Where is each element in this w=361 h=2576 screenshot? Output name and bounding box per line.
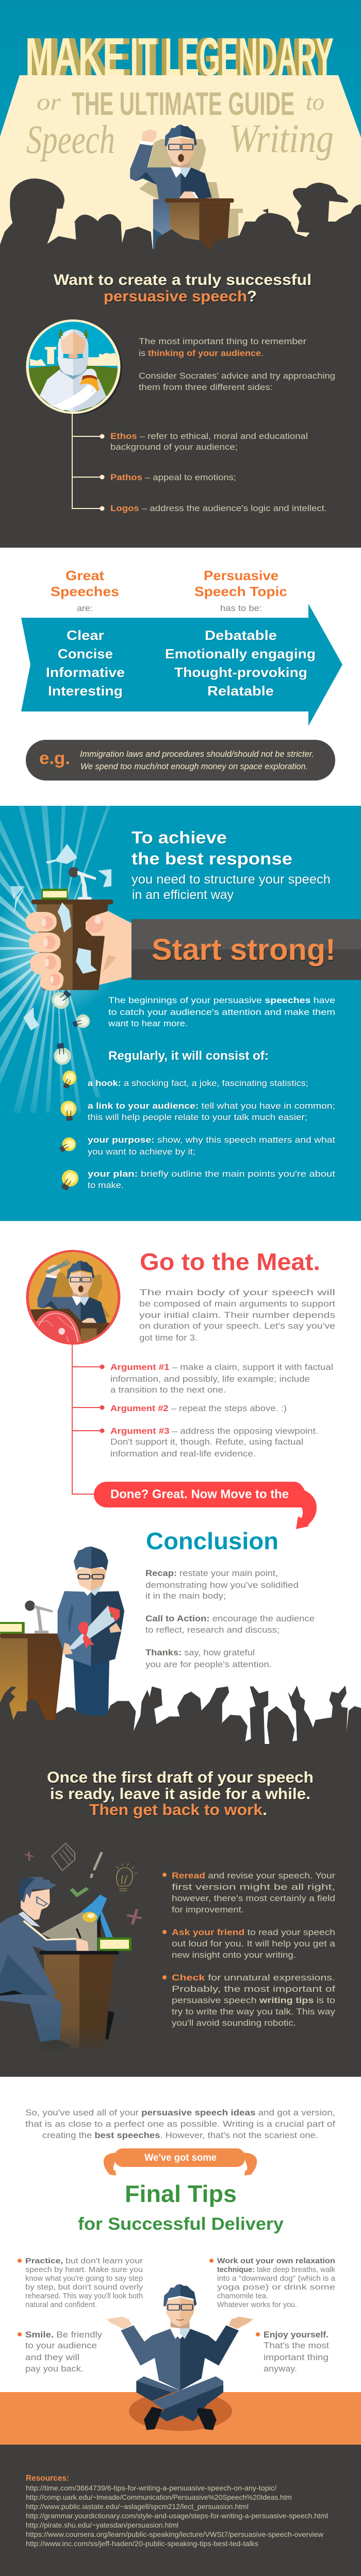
qualities lists: Informative [46,665,125,680]
qualities lists: Debatable [205,628,277,643]
list with bulb icons: to make. [88,1180,124,1190]
qualities lists: Relatable [207,683,274,699]
tips list: out loud for you. It will help you get a [172,1939,336,1948]
flying papers and microphone [10,844,111,1030]
recap text: it in the main body; [145,1591,226,1601]
ethos pathos logos list: Ethos – refer to ethical, moral and educational [110,431,308,441]
example pill: Immigration laws and procedures should/should not be stricter. [80,749,314,759]
subtitle: to [306,89,324,115]
qualities lists: Clear [67,628,104,643]
resources heading: Resources: [26,2474,69,2483]
heading: for Successful Delivery [78,2214,284,2234]
connector tree [72,414,104,510]
intro text: got time for 3. [139,1333,198,1343]
column headings: Great [65,568,104,583]
list with bulb icons: your purpose: show, why this speech matters and what [88,1135,335,1145]
tips list: Probably, the most important of [172,1984,335,1994]
body text: to catch your audience's attention and make them [108,1007,335,1017]
intro text: The main body of your speech will [139,1287,335,1297]
panel: go to the meat [25,1248,335,1529]
recap text: you are for people's attention. [145,1659,272,1669]
arguments list: Argument #2 – repeat the steps above. :) [110,1403,287,1413]
heading: Go to the Meat. [140,1248,320,1275]
tip: relaxation: yoga pose) or drink some [217,2283,335,2292]
tips list: for improvement. [172,1905,244,1914]
tip: practice [18,2257,143,2309]
list with bulb icons: this will help people relate to your talk much easier; [88,1112,307,1122]
heading: Conclusion [146,1528,278,1554]
start strong band: Start strong! [152,933,336,967]
arguments list: Don't support it, though. Refute, using factual [110,1437,303,1447]
tips list: Ask your friend to read your speech [172,1927,335,1937]
column headings: Speeches [51,584,119,599]
qualities lists: Thought-provoking [174,665,307,680]
heading: Once the first draft of your speech [47,1768,314,1786]
column subheadings [77,603,262,613]
arguments list [110,1362,333,1459]
tip: enjoy: anyway. [264,2364,297,2374]
heading: Final Tips [125,2180,237,2207]
illustration: speaker with bouquet [0,1547,124,1722]
tips list: try to write the way you talk. This way [172,2007,336,2016]
teal arrow banner [21,604,342,726]
ethos pathos logos list: Pathos – appeal to emotions; [110,472,236,482]
intro text: your initial claim. Their number depends [139,1310,335,1320]
tips list: Reread and revise your speech. Your [172,1871,335,1880]
heading [47,1768,314,1819]
tips list: you'll avoid sounding robotic. [172,2018,296,2028]
illustration: meditating speaker [106,2284,253,2431]
recap text: demonstrating how you've solidified [145,1580,299,1590]
recap text: Recap: restate your main point, [145,1568,278,1578]
resource links: http://grammar.yourdictionary.com/style-and-usage/steps-for-writing-a-persuasive-speech.html [26,2512,328,2520]
resource links: http://pirate.shu.edu/~yatesdan/persuasion.html [26,2521,178,2529]
tip: smile: pay you back. [25,2364,84,2374]
subtitle: Writing [229,116,334,161]
tip: practice: know what you're going to say step [25,2274,143,2283]
panel: dark socrates section [0,251,361,548]
dark background [0,2445,361,2576]
tip: relaxation: Work out your own relaxation [217,2257,335,2265]
heading: Then get back to work . [89,1801,267,1819]
audience silhouettes [0,178,361,252]
list with bulb icons: a link to your audience: tell what you have in common; [88,1101,335,1111]
resource links: http://www.public.iastate.edu/~aslagell/spcm212/lect_persuasion.html [26,2502,249,2511]
subtitle [26,86,334,162]
body text [108,995,335,1028]
intro text [139,336,335,392]
list with bulb icons: you want to achieve by it; [88,1147,195,1157]
icon: socrates portrait [23,319,124,415]
arguments list: Argument #1 – make a claim, support it with factual [110,1362,333,1372]
tips list: new insight onto your writing. [172,1950,296,1960]
banner: we've got some [104,2148,257,2176]
resource links [26,2484,328,2548]
panel: dark revision section [0,1686,361,2077]
ethos pathos logos list: Logos – address the audience's logic and intellect. [110,503,327,513]
spotlight beam [0,75,361,258]
ethos pathos logos list [110,431,327,513]
light rays [0,806,110,1113]
intro text: is thinking of your audience . [139,348,264,358]
panel: conclusion [0,1528,315,1722]
panel: great speeches comparison [21,568,342,781]
tip: smile: and they will [25,2352,79,2362]
tip: practice: rehearsed. This way you'll look both [25,2292,143,2300]
recap text: Call to Action: encourage the audience [145,1614,315,1623]
audience crowd silhouette [0,1686,361,1757]
start strong band [132,919,361,980]
tip: practice: Practice, but don't learn your [25,2257,143,2265]
connector tree [72,1345,104,1494]
intro text: creating the best speeches . However, that's not the scariest one. [42,2130,318,2140]
tip: enjoy [256,2330,329,2374]
body text: want to hear more. [108,1019,188,1028]
resource links: http://time.com/3664739/6-tips-for-writing-a-persuasive-speech-on-any-topic/ [26,2484,276,2492]
heading: is ready, leave it aside for a while. [50,1785,310,1803]
icon: speaker with fork and meat [25,1250,120,1348]
example pill: e.g. [39,749,70,768]
column headings: Speech Topic [194,584,287,599]
tip: smile [18,2330,103,2374]
tip: enjoy: important thing [264,2352,329,2362]
sub heading: Regularly, it will consist of: [108,1049,269,1063]
panel: resources [0,2445,361,2576]
arguments list: information and real-life evidence. [110,1449,256,1459]
banner: we've got some: We've got some [144,2153,217,2163]
subtitle: Speech [26,117,115,162]
arguments list: Argument #3 – address the opposing viewpoint. [110,1426,318,1436]
recap text [145,1568,315,1669]
intro text [25,2108,335,2140]
intro text: them from three different sides: [139,382,273,392]
dark background [0,251,361,548]
intro text [139,1287,335,1343]
intro text: that is as close to a perfect one as possible. Writing is a crucial part of [25,2119,335,2129]
intro text: The most important thing to remember [139,336,306,346]
panel: final tips [0,2108,361,2445]
ethos pathos logos list: background of your audience; [110,442,238,452]
tips list: persuasive speech writing tips is to [172,1995,335,2005]
tip: smile: to your audience [25,2341,97,2350]
column headings: Persuasive [204,568,278,583]
heading: the best response [132,849,292,868]
heading [54,272,311,305]
column subheadings: has to be: [220,603,262,613]
tip: relaxation [209,2257,336,2309]
arguments list: information, and possibly, life example; include [110,1374,310,1384]
tip: practice: natural and confident. [25,2300,97,2309]
heading [78,2180,284,2234]
illustration: writer at desk [0,1843,142,2049]
qualities lists: Concise [58,646,113,662]
heading: persuasive speech ? [104,288,257,305]
recap text: Thanks: say, how grateful [145,1648,255,1657]
resource links: http://comp.uark.edu/~lmeade/Communication/Persuasive%20Speech%20Ideas.htm [26,2493,292,2501]
callout arrow: done [94,1482,317,1529]
tip: enjoy: Enjoy yourself. [264,2330,329,2340]
orange floor [0,2392,361,2445]
qualities lists [46,628,316,699]
arguments list: a transition to the next one. [110,1385,226,1395]
list with bulb icons: a hook: a shocking fact, a joke, fascinating statistics; [88,1078,308,1088]
tip: relaxation: into a "downward dog" (which is a [217,2274,336,2283]
intro text: Consider Socrates' advice and try approaching [139,371,335,381]
tip: enjoy: That's the most [264,2341,329,2350]
title: make it legendary: IT [130,27,157,87]
intro text: be composed of main arguments to support [139,1299,335,1309]
tips list [162,1871,336,2028]
list with bulb icons [57,1070,335,1193]
resource links: https://www.coursera.org/learn/public-speaking/lecture/VWSt7/persuasive-speech-overview [26,2530,324,2538]
heading: you need to structure your speech [132,872,331,887]
tip: practice: by step, but don't sound overly [25,2283,143,2292]
resource links: http://www.inc.com/ss/jeff-haden/20-public-speaking-tips-best-ted-talks [26,2539,258,2548]
teal sky [0,0,361,185]
tips list: first version might be all right, [172,1882,335,1892]
intro text: So, you've used all of your persuasive speech ideas and got a version, [25,2108,335,2117]
body text: The beginnings of your persuasive speeches have [108,995,335,1005]
heading [132,828,331,902]
title: make it legendary [25,27,334,87]
tip: relaxation: chamomile tea. [217,2292,268,2300]
example pill [26,740,335,781]
illustration: speaker at podium [130,125,243,251]
title: make it legendary: MAKE [25,27,125,87]
bulbs falling [48,986,92,1067]
qualities lists: Interesting [48,683,123,699]
heading: To achieve [132,828,227,847]
intro text: on duration of your speech. Let's say you've [139,1321,335,1331]
tip: smile: Smile. Be friendly [25,2330,103,2340]
column subheadings: are: [77,603,93,613]
panel: start strong section [0,806,361,1221]
list with bulb icons: your plan: briefly outline the main points you're about [88,1169,335,1179]
tips list: Check for unnatural expressions. [172,1973,335,1982]
callout arrow: done: Done? Great. Now Move to the [110,1487,289,1501]
dark background [0,1752,361,2077]
subtitle: or [37,89,61,115]
tips list: however, there's most certainly a field [172,1893,335,1903]
tip: relaxation: technique: take deep breaths, walk [217,2265,335,2274]
tip: relaxation: Whatever works for you. [217,2300,297,2309]
tip: practice: speech by heart. Make sure you [25,2265,143,2274]
recap text: to reflect, research and discuss; [145,1625,280,1635]
heading: in an efficient way [132,888,234,902]
illustration: hand gripping podium [26,886,132,992]
header panel [0,0,361,258]
qualities lists: Emotionally engaging [165,646,316,662]
example pill: We spend too much/not enough money on space exploration. [80,761,308,771]
heading: Want to create a truly successful [54,272,311,289]
teal background [0,806,361,1221]
column headings [51,568,287,599]
